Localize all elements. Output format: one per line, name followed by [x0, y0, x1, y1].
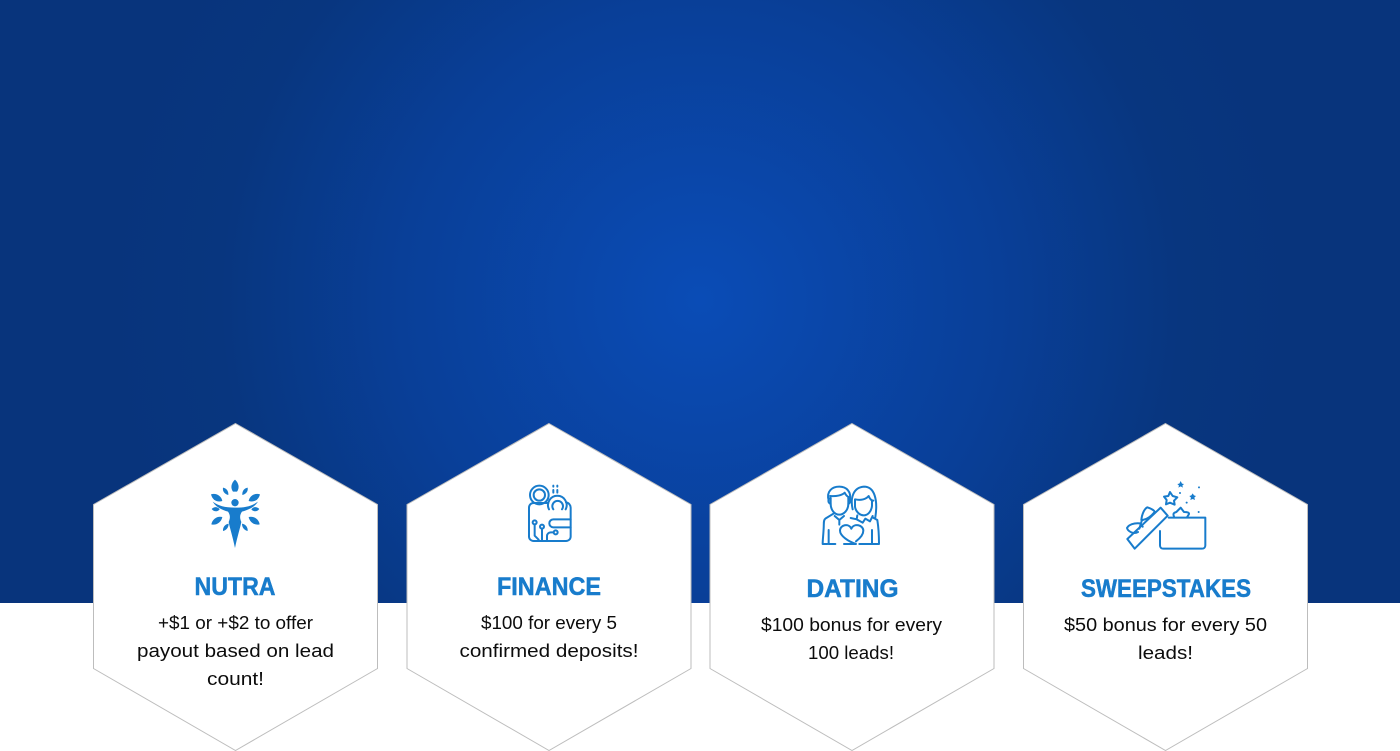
text: dating bonus: 100 leads!: [808, 642, 894, 663]
text: finance bonus: confirmed deposits!: [460, 640, 638, 661]
text: finance bonus: [460, 612, 638, 661]
icon: open gift box with stars: [1127, 481, 1205, 549]
panel: finance: [407, 424, 691, 750]
heading: DATING: DATING: [806, 575, 898, 603]
icon: figure with leaves: [211, 480, 260, 548]
text: nutra bonus: payout based on lead: [137, 640, 334, 661]
text: finance bonus: $100 for every 5: [481, 612, 617, 633]
panel: sweepstakes: [1024, 424, 1308, 750]
text: sweepstakes bonus: $50 bonus for every 50: [1064, 614, 1267, 635]
panel: nutra: [94, 424, 378, 750]
hexagon: sweepstakes: [1024, 424, 1308, 750]
hexagon: dating: [710, 424, 994, 750]
text: nutra bonus: count!: [207, 668, 264, 689]
text: nutra bonus: +$1 or +$2 to offer: [158, 612, 313, 633]
heading: SWEEPSTAKES: SWEEPSTAKES: [1081, 575, 1251, 603]
text: nutra bonus: [137, 612, 334, 689]
text: sweepstakes bonus: [1064, 614, 1267, 663]
panel: dating: [710, 424, 994, 750]
hexagon: nutra: [94, 424, 378, 750]
hexagon: finance: [407, 424, 691, 750]
icon: couple with heart: [823, 487, 879, 544]
text: sweepstakes bonus: leads!: [1138, 642, 1193, 663]
heading: FINANCE: FINANCE: [497, 573, 601, 601]
text: dating bonus: [761, 614, 943, 663]
text: dating bonus: $100 bonus for every: [761, 614, 943, 635]
icon: wallet with coins: [529, 486, 571, 541]
heading: NUTRA: NUTRA: [194, 573, 276, 601]
